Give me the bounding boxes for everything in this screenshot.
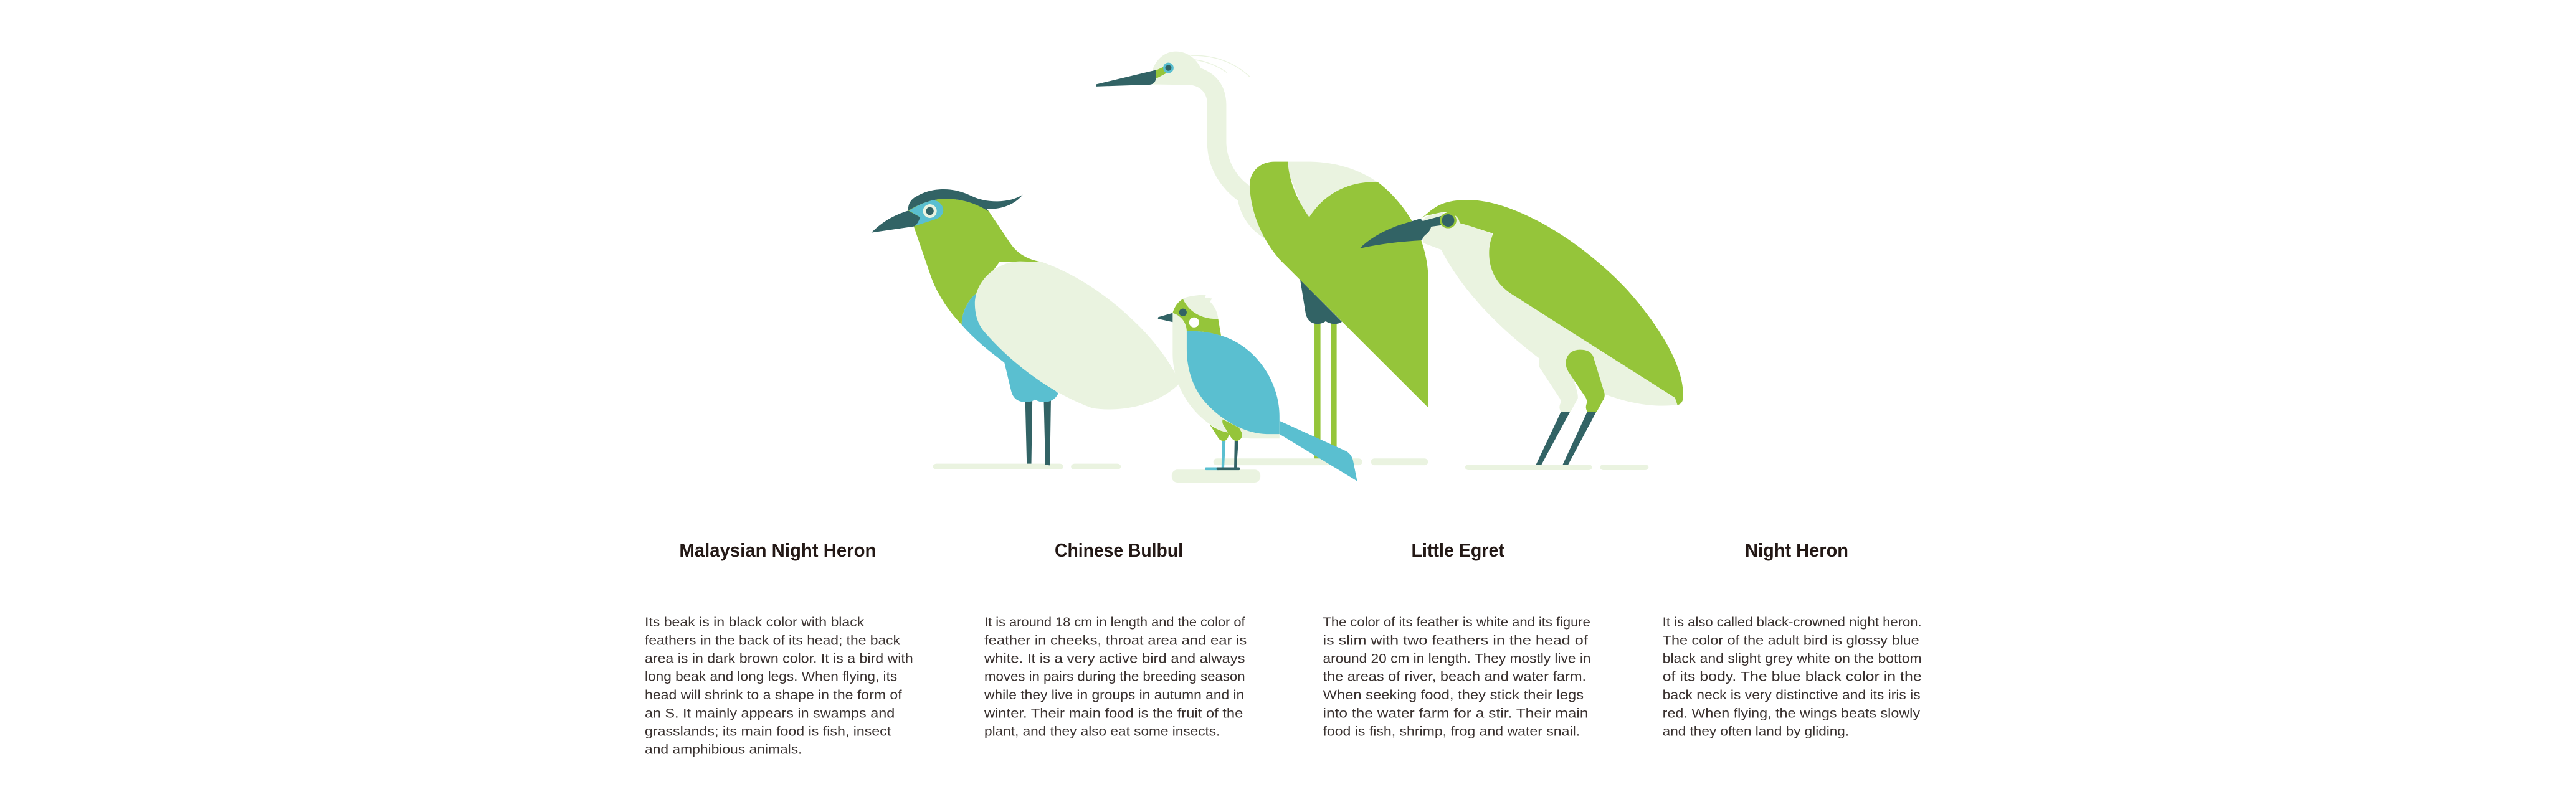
text block: Little Egret description: the areas of river, beach and water farm. <box>1323 670 1586 684</box>
eye <box>923 204 937 218</box>
ground strips: night heron <box>1465 465 1648 470</box>
bird: Night Heron <box>1360 200 1683 470</box>
text block: Chinese Bulbul description: It is around 18 cm in length and the color of <box>984 615 1245 630</box>
text block: Night Heron description: and they often land by gliding. <box>1663 724 1849 738</box>
eye <box>1440 212 1457 229</box>
text block: Malaysian Night Heron description: long beak and long legs. When flying, its <box>645 670 897 684</box>
blue belly and thighs <box>962 293 1058 402</box>
bird: Chinese Bulbul <box>1158 295 1357 483</box>
eye <box>1179 309 1187 316</box>
blue body <box>1187 331 1280 434</box>
heading: Night Heron: Night Heron <box>1745 539 1848 561</box>
egret rump <box>1300 280 1342 324</box>
text block: Night Heron description: of its body. The blue black color in the <box>1663 670 1922 684</box>
text block: Chinese Bulbul description: plant, and they also eat some insects. <box>984 724 1220 738</box>
text block: Chinese Bulbul description: while they live in groups in autumn and in <box>984 688 1244 702</box>
egret beak <box>1096 70 1156 87</box>
egret legs <box>1314 323 1337 458</box>
beak <box>1360 216 1442 248</box>
bird: Malaysian Night Heron <box>872 189 1179 469</box>
ground strips: egret <box>1214 458 1428 465</box>
text block: Little Egret description: is slim with two feathers in the head of <box>1323 633 1588 648</box>
perch <box>1172 469 1260 483</box>
text block: Night Heron description: black and slight grey white on the bottom <box>1663 651 1922 666</box>
legs and feet <box>1205 440 1240 470</box>
text block: Chinese Bulbul description: feather in cheeks, throat area and ear is <box>984 633 1247 648</box>
heading: Chinese Bulbul: Chinese Bulbul <box>1055 539 1183 561</box>
egret eye <box>1163 63 1174 73</box>
text block: Malaysian Night Heron description: area is in dark brown color. It is a bird with <box>645 651 913 666</box>
egret head plumes <box>1191 55 1250 77</box>
tail <box>1280 421 1357 481</box>
text block: Malaysian Night Heron description: grasslands; its main food is fish, insect <box>645 724 891 738</box>
text block: Chinese Bulbul description: winter. Their main food is the fruit of the <box>984 706 1243 720</box>
beak <box>1158 313 1172 322</box>
text block: Night Heron description: back neck is very distinctive and its iris is <box>1663 688 1921 702</box>
crest <box>908 189 1023 211</box>
text block: Little Egret description <box>1323 615 1591 738</box>
text block: Little Egret description: The color of its feather is white and its figure <box>1323 615 1590 630</box>
text block: Night Heron description: It is also called black-crowned night heron. <box>1663 615 1922 630</box>
thigh <box>1566 350 1605 412</box>
legs <box>1536 412 1596 465</box>
egret lore <box>1156 66 1166 78</box>
text block: Night Heron description <box>1663 615 1922 738</box>
green body <box>908 199 1042 325</box>
text block: Little Egret description: food is fish, shrimp, frog and water snail. <box>1323 724 1580 738</box>
cream cap <box>1183 295 1218 319</box>
blue eye patch <box>909 200 943 226</box>
text block: Malaysian Night Heron description <box>645 615 913 757</box>
cream brow <box>1423 212 1444 220</box>
green back and wing <box>1420 200 1683 405</box>
cream breast <box>1172 313 1280 438</box>
text block: Malaysian Night Heron description: feathers in the back of its head; the back <box>645 633 901 648</box>
text block: Malaysian Night Heron description: Its beak is in black color with black <box>645 615 865 630</box>
white ear patch <box>1189 318 1199 328</box>
thighs <box>1210 420 1242 441</box>
cream wing <box>975 262 1179 410</box>
text block: Malaysian Night Heron description: an S. It mainly appears in swamps and <box>645 706 895 720</box>
bird: Little Egret <box>1096 52 1428 465</box>
egret body green <box>1250 162 1428 408</box>
text block: Little Egret description: around 20 cm in length. They mostly live in <box>1323 651 1591 666</box>
text block: Night Heron description: The color of the adult bird is glossy blue <box>1663 633 1919 648</box>
beak <box>872 210 920 233</box>
text block: Little Egret description: When seeking food, they stick their legs <box>1323 688 1584 702</box>
text block: Chinese Bulbul description <box>984 615 1247 738</box>
text block: Chinese Bulbul description: white. It is a very active bird and always <box>984 651 1245 666</box>
heading: Malaysian Night Heron: Malaysian Night Heron <box>679 539 876 561</box>
egret wing cream <box>1284 162 1379 225</box>
text block: Night Heron description: red. When flying, the wings beats slowly <box>1663 706 1921 720</box>
text block: Malaysian Night Heron description: head will shrink to a shape in the form of <box>645 688 902 702</box>
text block: Chinese Bulbul description: moves in pairs during the breeding season <box>984 670 1245 684</box>
heading: Little Egret: Little Egret <box>1412 539 1504 561</box>
ground strips: night heron <box>933 464 1121 469</box>
text block: Malaysian Night Heron description: and amphibious animals. <box>645 743 802 757</box>
text block: Little Egret description: into the water farm for a stir. Their main <box>1323 706 1589 720</box>
legs <box>1025 400 1051 465</box>
green head <box>1172 299 1221 336</box>
cream underside <box>1423 215 1678 412</box>
egret head and neck <box>1153 52 1265 238</box>
